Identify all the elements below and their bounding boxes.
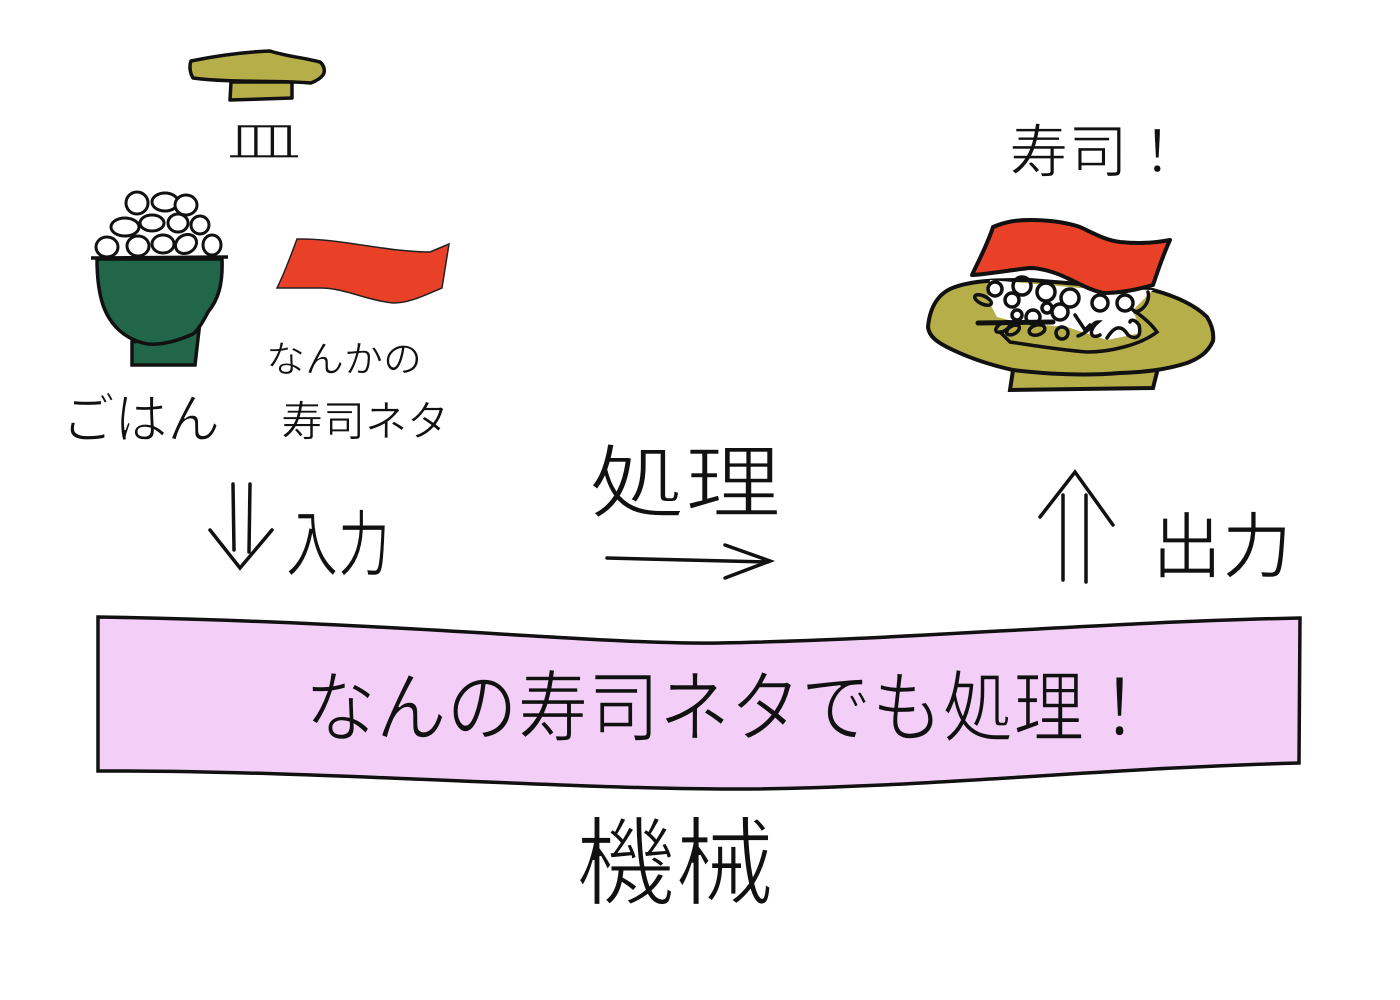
label: plate: 皿 bbox=[226, 118, 302, 167]
label: sushi: 寿司！ bbox=[1009, 120, 1187, 185]
rice on plate bbox=[988, 280, 1153, 340]
label: some sushi topping bbox=[266, 339, 449, 445]
icon: plate bbox=[190, 51, 324, 100]
label: machine: 機械 bbox=[576, 811, 774, 918]
icon: finished sushi bbox=[928, 220, 1213, 390]
label: gohan: ごはん bbox=[62, 390, 220, 450]
label: output: 出力 bbox=[1152, 508, 1292, 588]
icon: sushi topping bbox=[277, 239, 449, 303]
label: some sushi topping: 寿司ネタ bbox=[281, 398, 449, 445]
label: input: 入力 bbox=[286, 506, 390, 586]
arrow: input bbox=[210, 484, 272, 568]
panel: machine banner bbox=[98, 617, 1300, 789]
label: processing: 処理 bbox=[589, 439, 781, 528]
icon: rice bowl bbox=[91, 192, 228, 365]
label: some sushi topping: なんかの bbox=[266, 339, 422, 380]
arrow: output bbox=[1040, 472, 1113, 582]
banner text: なんの寿司ネタでも処理！ bbox=[305, 664, 1155, 752]
arrow: processing bbox=[607, 545, 770, 578]
